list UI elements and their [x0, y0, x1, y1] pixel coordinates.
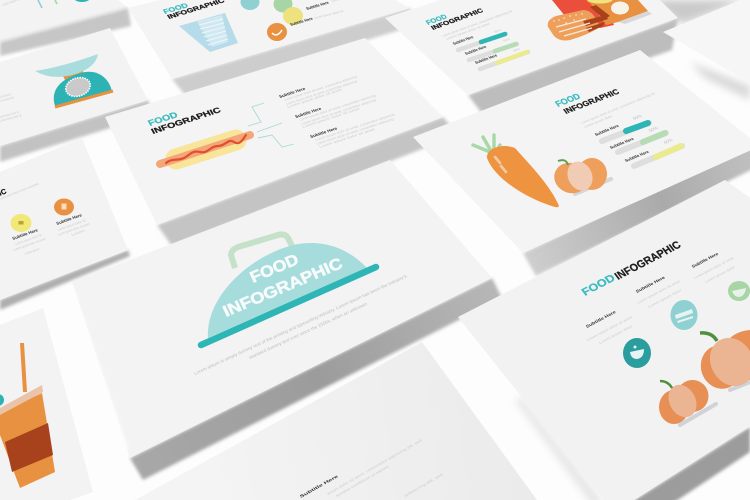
cloche title: INFOGRAPHIC — [221, 255, 346, 321]
subtitle block 1: Subtitle Here — [278, 86, 307, 99]
carrot slide title: INFOGRAPHIC — [562, 87, 621, 116]
carrot slide title: Lorem ipsum dolor sit amet, consectetur adipiscing elit — [580, 92, 656, 125]
subtitle block 1: Subtitle Here — [585, 309, 618, 329]
main slide soft left edge — [70, 286, 126, 450]
subtitle block 1: Lorem ipsum dolor sit amet — [287, 88, 343, 109]
pumpkin slide edge shadow — [516, 395, 606, 500]
burger slide title: INFOGRAPHIC — [430, 8, 485, 32]
subtitle block 2 — [294, 94, 377, 129]
subtitle block 3: Lorem ipsum dolor sit amet, consectetur adipiscing — [316, 117, 395, 146]
subtitle block 3 — [309, 113, 395, 149]
panel: circles slide: Lorem ipsum dolor sit amet consectetur — [0, 182, 40, 201]
pumpkin slide title: FOOD — [580, 272, 618, 298]
labels: burger slide: Subtitle Here — [474, 53, 499, 65]
panel: cup slide — [128, 0, 410, 79]
subtitle block 1: Lorem ipsum dolor sit amet, consectetur adipiscing — [284, 75, 358, 102]
pumpkin slide title — [580, 239, 684, 298]
labels: burger slide: 65% — [493, 28, 502, 34]
burger slide title: Lorem ipsum dolor sit amet, consectetur adipiscing elit — [441, 9, 513, 38]
bottom slide text: ipsum dolor sit amet, consectetur adipiscing elit, sed — [326, 439, 423, 496]
subtitle blocks: Lorem ipsum dolor sit — [57, 218, 86, 232]
icon: bowl circle — [623, 338, 651, 368]
bottom slide text — [299, 439, 444, 499]
subtitle block 1 — [585, 309, 634, 345]
panel: main slide — [70, 160, 492, 458]
hot dog slide title — [146, 105, 223, 136]
subtitle block 2: Lorem ipsum dolor — [647, 288, 683, 309]
bottom slide text: Subtitle Here — [299, 473, 340, 499]
panel: drink slide — [0, 308, 93, 500]
subtitle blocks: Subtitle Here — [11, 227, 39, 241]
cup slide title: INFOGRAPHIC — [166, 0, 227, 21]
labels: burger slide: 50% — [502, 37, 511, 43]
burger slide title: FOOD — [425, 14, 449, 27]
icon: green circle — [274, 0, 292, 12]
carrot slide title: FOOD — [553, 91, 583, 109]
icon: measuring cup — [179, 13, 238, 52]
cup slide title: FOOD — [162, 3, 190, 16]
cloche title: FOOD — [248, 251, 302, 287]
labels: carrot slide — [594, 113, 674, 163]
labels: carrot slide: Subtitle Here — [624, 149, 650, 163]
subtitle block 3: Subtitle Here — [309, 126, 339, 139]
subtitle block 2: Lorem ipsum dolor sit amet, consectetur adipiscing — [301, 98, 377, 126]
icon: iced drink — [0, 343, 55, 488]
icon: teal circle — [240, 0, 260, 10]
icon: pumpkin — [550, 157, 611, 198]
labels: carrot slide: 60% — [663, 137, 674, 145]
carrot slide title: Lorem ipsum dolor — [583, 114, 614, 129]
carrot slide title — [553, 87, 656, 129]
subtitle block 2: Lorem ipsum dolor sit amet — [302, 107, 361, 129]
panel: carrot slide — [413, 50, 750, 253]
subtitle blocks: Lorem — [71, 229, 86, 237]
labels: burger slide — [452, 28, 521, 65]
panel: hot dog slide — [105, 38, 443, 225]
icon: carrot — [473, 135, 559, 207]
subtitle blocks: Subtitle Here — [55, 212, 83, 226]
icon: cloche — [201, 234, 376, 345]
subtitle blocks — [11, 212, 90, 256]
subtitle block 3 — [691, 251, 737, 284]
subtitle block 1: Lorem ipsum dolor sit amet, consectetur adipiscing — [286, 79, 358, 106]
subtitle blocks: Lorem ipsum dolor sit amet — [13, 237, 46, 252]
subtitle block 2: Lorem ipsum dolor sit amet — [636, 279, 681, 305]
icon: hot dog — [160, 135, 250, 164]
subtitle block 1: Lorem ipsum dolor — [598, 324, 634, 345]
connector lines — [248, 103, 294, 147]
subtitle blocks: Lorem ipsum dolor sit — [15, 233, 42, 246]
bars: burger slide — [458, 34, 528, 69]
subtitle block 2: Lorem ipsum dolor sit amet, consectetur adipiscing — [299, 94, 377, 122]
subtitle block 3: Lorem ipsum dolor — [704, 265, 737, 284]
subtitle blocks: Lorem ipsum — [24, 247, 40, 256]
icon: yellow circle — [10, 214, 32, 232]
icon: pot circle — [728, 281, 750, 301]
labels: burger slide: Subtitle Here — [452, 34, 475, 46]
subtitle block 2: Subtitle Here — [294, 106, 323, 119]
subtitle block 2 — [635, 275, 683, 309]
bottom slide text: tempor incididunt ut labore — [335, 465, 390, 498]
panel: circles slide — [0, 138, 128, 300]
labels: carrot slide: Subtitle Here — [594, 123, 620, 137]
subtitle block 1: Lorem ipsum dolor sit amet — [586, 315, 633, 342]
cup slide labels: Subtitle Here — [289, 16, 314, 27]
subtitle block 3: Subtitle Here — [691, 251, 720, 269]
panel: far right slide — [663, 0, 750, 83]
icon: large pumpkin — [695, 330, 750, 395]
burger slide title: Lorem ipsum dolor sit amet — [445, 22, 491, 41]
cup slide labels: Lorem ipsum dolor sit — [313, 9, 344, 20]
panel: burger slide — [385, 0, 678, 95]
subtitle block 3: Lorem ipsum dolor sit amet — [693, 256, 735, 280]
panel: scale slide — [0, 28, 148, 146]
subtitle block 3: Lorem ipsum dolor sit amet — [319, 127, 376, 149]
icon: kitchen scale — [35, 54, 113, 107]
icon: yellow circle — [283, 7, 303, 25]
subtitle block 3: Lorem ipsum dolor sit amet, consectetur adipiscing — [315, 113, 395, 142]
subtitle block 2: Subtitle Here — [635, 275, 667, 294]
hot dog slide title: INFOGRAPHIC — [150, 105, 223, 136]
subtitle blocks: Lorem ipsum dolor sit amet — [57, 222, 90, 237]
icon: burger circle — [670, 300, 698, 330]
labels: burger slide: Subtitle Here — [464, 44, 488, 56]
labels: burger slide: 60% — [512, 47, 521, 53]
panel: pumpkin slide — [458, 180, 750, 500]
labels: carrot slide: 65% — [632, 113, 643, 121]
icon: small pumpkin — [659, 380, 716, 425]
labels: carrot slide: 50% — [648, 125, 659, 133]
icon: burger and drink — [548, 0, 652, 40]
burger slide title — [425, 8, 513, 41]
cup slide title — [162, 0, 227, 21]
scale text lines — [0, 92, 22, 123]
main body text: Lorem Ipsum is simply dummy text of the printing and typesetting industry. Lorem Ipsum has been the industry's — [193, 273, 408, 376]
cup slide labels — [289, 0, 361, 27]
pumpkin slide title: INFOGRAPHIC — [613, 239, 684, 282]
icon: orange circle — [267, 23, 287, 41]
main body text: standard dummy text ever since the 1500s, when an unknown — [248, 301, 368, 360]
panel: bottom slide — [135, 342, 537, 500]
labels: carrot slide: Subtitle Here — [609, 136, 635, 150]
bars: carrot slide — [602, 123, 682, 166]
hot dog slide title: FOOD — [146, 110, 179, 128]
icon: orange circle — [54, 198, 74, 216]
bottom slide text: adipiscing elit, sed — [403, 473, 444, 498]
top left slide — [0, 0, 128, 42]
